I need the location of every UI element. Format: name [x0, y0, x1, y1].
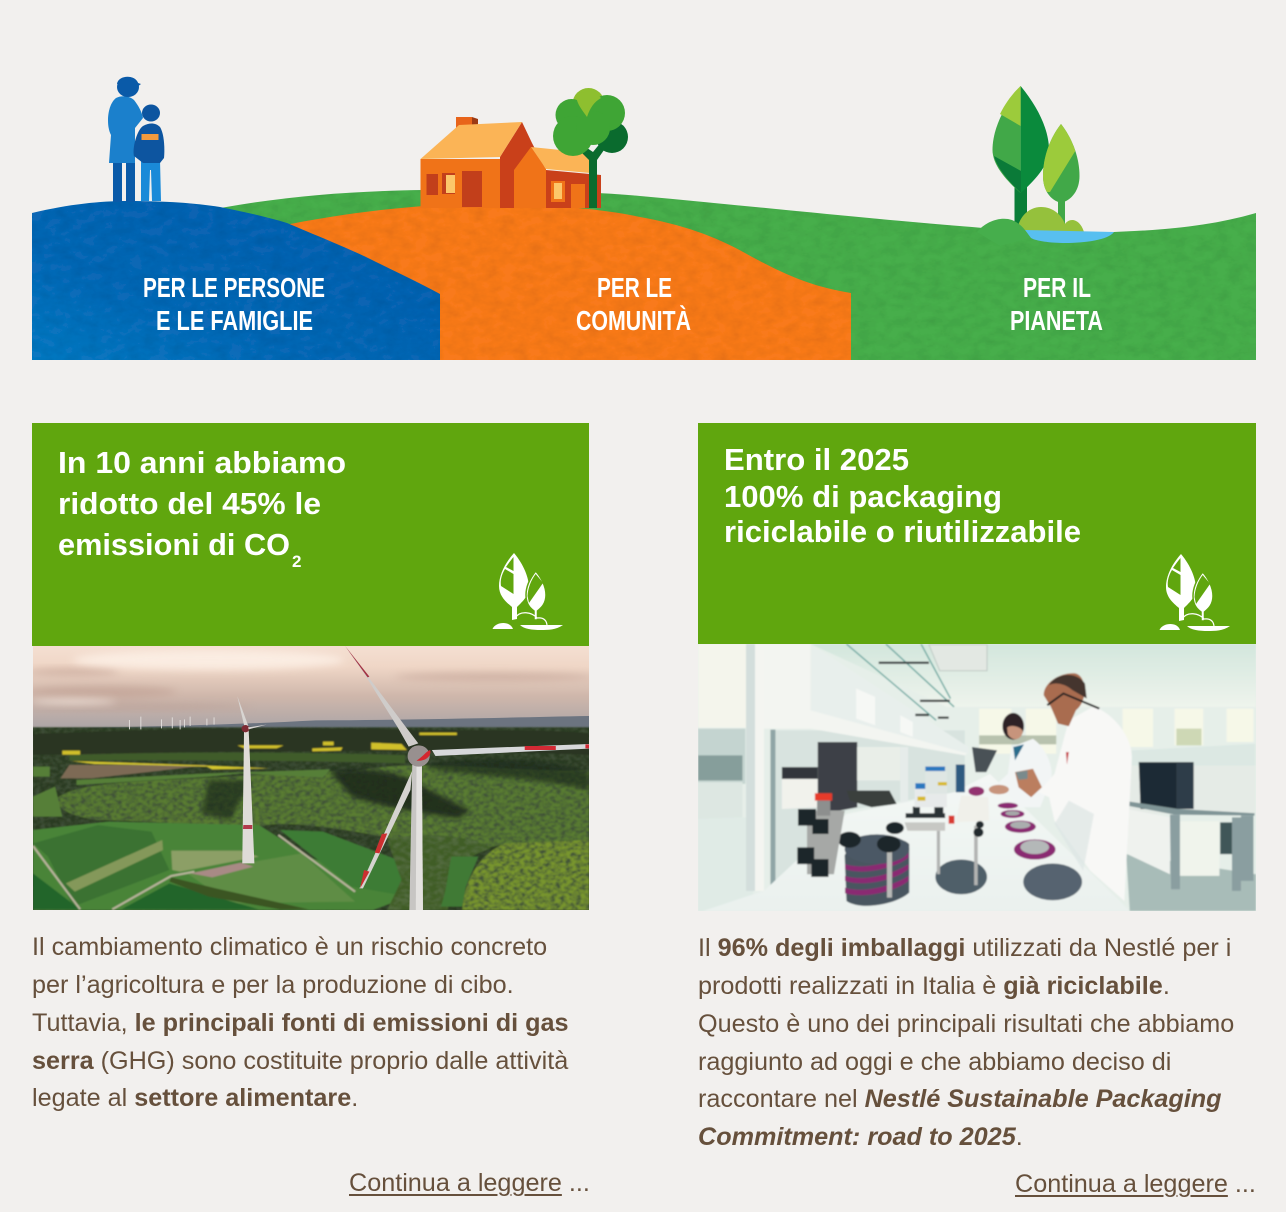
hill: blue people and families [32, 201, 440, 360]
icon: houses [420, 117, 601, 208]
round sample trays [935, 787, 1082, 900]
side table and drawers [1127, 801, 1255, 816]
stacked purple tray rig [838, 822, 909, 906]
icon: white leaves [1160, 554, 1230, 631]
text block: right body: raggiunto ad oggi e che abbiamo deciso di [698, 1048, 1171, 1076]
text block: right body: raccontare nel Nestlé Sustainable Packaging [698, 1085, 1222, 1113]
text block: right body: Commitment: road to 2025. [698, 1123, 1023, 1151]
scale and bottles [905, 747, 997, 831]
text block: left body: Il cambiamento climatico è un rischio concreto [32, 933, 547, 961]
heading: packaging target: riciclabile o riutilizzabile [724, 514, 1081, 549]
distant hills [33, 716, 589, 740]
text block: right body: Questo è uno dei principali risultati che abbiamo [698, 1010, 1234, 1038]
photo: wind turbines over forest [33, 646, 589, 910]
text block: right body: Il 96% degli imballaggi utilizzati da Nestlé per i [698, 934, 1231, 962]
small turbine [237, 696, 267, 863]
heading: CO2 reduction: ridotto del 45% le [58, 486, 321, 521]
banner label: per il pianeta: PER IL [1023, 272, 1091, 303]
link: continue reading left: Continua a leggere ... [349, 1169, 590, 1197]
heading: packaging target: Entro il 2025 [724, 442, 909, 477]
text block: left body: serra (GHG) sono costituite proprio dalle attività [32, 1047, 568, 1075]
banner label: per il pianeta: PIANETA [1010, 305, 1103, 336]
right wall counter [1132, 744, 1255, 765]
panel: right headline box [698, 423, 1256, 644]
far turbines [129, 717, 214, 729]
hill: green planet [190, 190, 1256, 360]
icon: leaf trees and lake [977, 86, 1114, 246]
clamp stand with red caps [797, 793, 845, 877]
panel: left headline box [32, 423, 589, 646]
heading: packaging target [724, 442, 1081, 549]
text block: left body: per l’agricoltura e per la produzione di cibo. [32, 971, 514, 999]
large turbine [345, 646, 589, 910]
heading: CO2 reduction [58, 445, 346, 571]
hill: orange community [280, 204, 851, 360]
icon: mother and child [108, 77, 164, 202]
scientist man [1015, 673, 1132, 901]
ceiling vent [929, 645, 987, 671]
icon: community tree [553, 88, 628, 208]
link: continue reading right: Continua a leggere ... [1015, 1170, 1256, 1198]
right floor [1126, 854, 1256, 911]
bench top [703, 774, 1130, 911]
heading: CO2 reduction: emissioni di CO [58, 527, 290, 562]
overhead shelf unit [764, 644, 968, 755]
text block: left body: Tuttavia, le principali fonti di emissioni di gas [32, 1009, 569, 1037]
text block: right body: prodotti realizzati in Italia è già riciclabile. [698, 972, 1170, 1000]
windows [979, 709, 1253, 754]
glass shelf [846, 644, 954, 720]
banner label: per le persone e le famiglie: E LE FAMIGLIE [156, 305, 313, 336]
heading: packaging target: 100% di packaging [724, 479, 1002, 514]
column [746, 644, 764, 891]
text block: left body [32, 933, 569, 1112]
landscape base and forests [30, 727, 591, 914]
text block: right body [698, 934, 1234, 1151]
scientist woman [989, 713, 1052, 807]
text block: left body: legate al settore alimentare. [32, 1084, 358, 1112]
banner label: per le comunita: COMUNITÀ [576, 305, 691, 336]
photo: food packaging laboratory [698, 644, 1256, 911]
banner: three hills illustration [32, 76, 1256, 360]
banner label: per le comunita: PER LE [597, 272, 672, 303]
icon: white leaves [492, 553, 563, 630]
black oven [1139, 762, 1194, 809]
lab room background [696, 640, 1259, 914]
left floor and furniture [698, 817, 753, 911]
heading: CO2 reduction: 2 [292, 552, 301, 571]
sky [23, 640, 594, 730]
heading: CO2 reduction: In 10 anni abbiamo [58, 445, 346, 480]
under-shelf view [773, 730, 965, 884]
banner label: per le persone e le famiglie: PER LE PERSONE [143, 272, 325, 303]
